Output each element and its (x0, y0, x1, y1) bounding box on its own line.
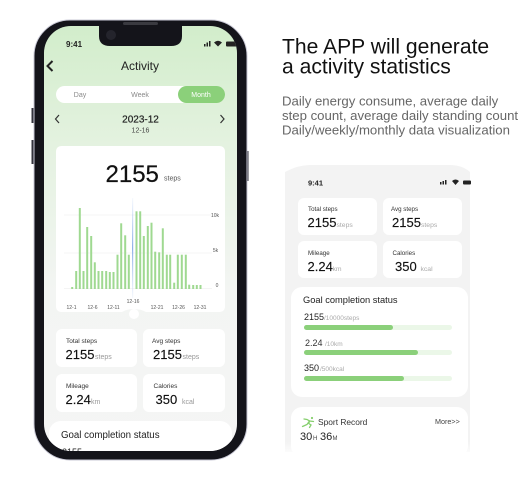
stat card: total steps: 2155 (308, 215, 336, 230)
bar chart: 12-1 (66, 305, 77, 311)
panel: sport record: Sport Record (318, 417, 368, 427)
panel: goal completion, cropped by screen (49, 421, 232, 451)
description text: Daily energy consume, average daily (282, 94, 499, 108)
date selector: 2023-12 (122, 114, 159, 126)
icon: runner (302, 417, 314, 428)
goal: calories (304, 363, 452, 381)
stat card: calories: 350 (395, 259, 417, 274)
bar chart: 0 (216, 283, 219, 289)
status bar: 9:41 (66, 40, 83, 49)
bar chart: 12-21 (151, 305, 164, 311)
panel: step chart card (56, 146, 225, 319)
bar chart: 12-31 (194, 305, 207, 311)
total steps value: 2155 (106, 161, 159, 188)
goal: calories: 350 (304, 363, 319, 373)
bar chart: 12-26 (172, 305, 185, 311)
stat card: total steps: Total steps (308, 206, 338, 213)
stat card: average steps (143, 329, 225, 367)
phone mockup: activity screen (32, 20, 248, 481)
stat card: total steps: steps (336, 222, 353, 229)
stat card: calories: 350 (156, 392, 177, 407)
panel: sport record (291, 407, 468, 457)
stat card: calories (143, 374, 225, 412)
stat card: calories: Calories (392, 250, 415, 257)
stat card: average steps: 2155 (153, 347, 182, 362)
phone frame (32, 20, 248, 460)
screen background (44, 26, 237, 451)
stat card: mileage: 2.24 (66, 392, 91, 407)
stat card: calories (383, 241, 462, 278)
period tabs: Month (191, 92, 211, 99)
stat card: calories: Calories (154, 383, 178, 390)
stat card: mileage: Mileage (66, 383, 89, 390)
panel: sport record: More>> (435, 417, 460, 426)
stat card: total steps: steps (95, 354, 112, 361)
status bar (66, 40, 236, 47)
stat card: mileage: km (91, 399, 100, 406)
goal: steps (304, 312, 452, 330)
status bar: 9:41 (308, 178, 323, 188)
panel: goal completion status: Goal completion status (303, 295, 398, 305)
heading (282, 36, 489, 78)
stat card: average steps: Avg steps (152, 338, 181, 345)
panel: sport record: 36 (320, 431, 332, 443)
stat card: average steps: 2155 (392, 215, 421, 230)
stat card: average steps: steps (182, 354, 200, 361)
stat card: mileage (298, 241, 377, 278)
stat card: average steps: Avg steps (391, 206, 418, 213)
screen background panel (285, 165, 470, 452)
bar chart: 12-16 (127, 299, 140, 305)
header: back arrow and title (48, 59, 159, 73)
header: back arrow and title: Activity (121, 59, 159, 73)
stat card: total steps: Total steps (66, 338, 98, 345)
bar chart: 12-6 (87, 305, 98, 311)
phone screen detail (285, 165, 471, 457)
status bar (308, 178, 471, 188)
stat card: mileage: km (332, 266, 342, 273)
bar chart (64, 198, 220, 311)
bar chart: 12-11 (107, 305, 120, 311)
panel: goal completion status (291, 287, 468, 397)
stat card: mileage: 2.24 (308, 259, 333, 274)
notch with camera (99, 25, 182, 46)
panel: sport record: H (313, 436, 317, 442)
goal: steps: /10000steps (324, 315, 360, 322)
stat card: mileage (56, 374, 137, 412)
panel: sport record: M (332, 436, 338, 442)
period tabs (56, 86, 225, 103)
description text: step count, average daily standing count (282, 108, 518, 123)
period tabs: Day (74, 92, 87, 99)
bar chart: 10k (211, 213, 220, 219)
stat card: calories: kcal (182, 399, 195, 406)
stat card: total steps (56, 329, 137, 367)
heading: a activity statistics (282, 56, 451, 78)
stat card: average steps: steps (421, 222, 438, 229)
bar chart: 5k (213, 248, 219, 254)
panel: goal completion, cropped by screen: 2155 (62, 447, 82, 457)
goal: calories: /500kcal (320, 366, 345, 373)
panel: goal completion, cropped by screen: Goal completion status (61, 430, 160, 441)
stat card: calories: kcal (420, 266, 433, 273)
goal: mileage (304, 338, 452, 355)
total steps value: steps (164, 176, 181, 182)
goal: mileage: 2.24 (305, 338, 323, 348)
description text (282, 94, 518, 138)
stat card: average steps (383, 198, 462, 235)
stat card: total steps: 2155 (66, 347, 94, 362)
goal: steps: 2155 (304, 312, 324, 322)
date selector (56, 114, 224, 134)
period tabs: Week (131, 92, 149, 99)
stat card: mileage: Mileage (308, 250, 330, 257)
date selector: 12-16 (132, 128, 150, 134)
heading: The APP will generate (282, 36, 489, 58)
panel: sport record: 30 (300, 431, 312, 443)
goal: mileage: /10km (325, 341, 343, 348)
description text: Daily/weekly/monthly data visualization (282, 122, 510, 138)
stat card: total steps (298, 198, 377, 235)
